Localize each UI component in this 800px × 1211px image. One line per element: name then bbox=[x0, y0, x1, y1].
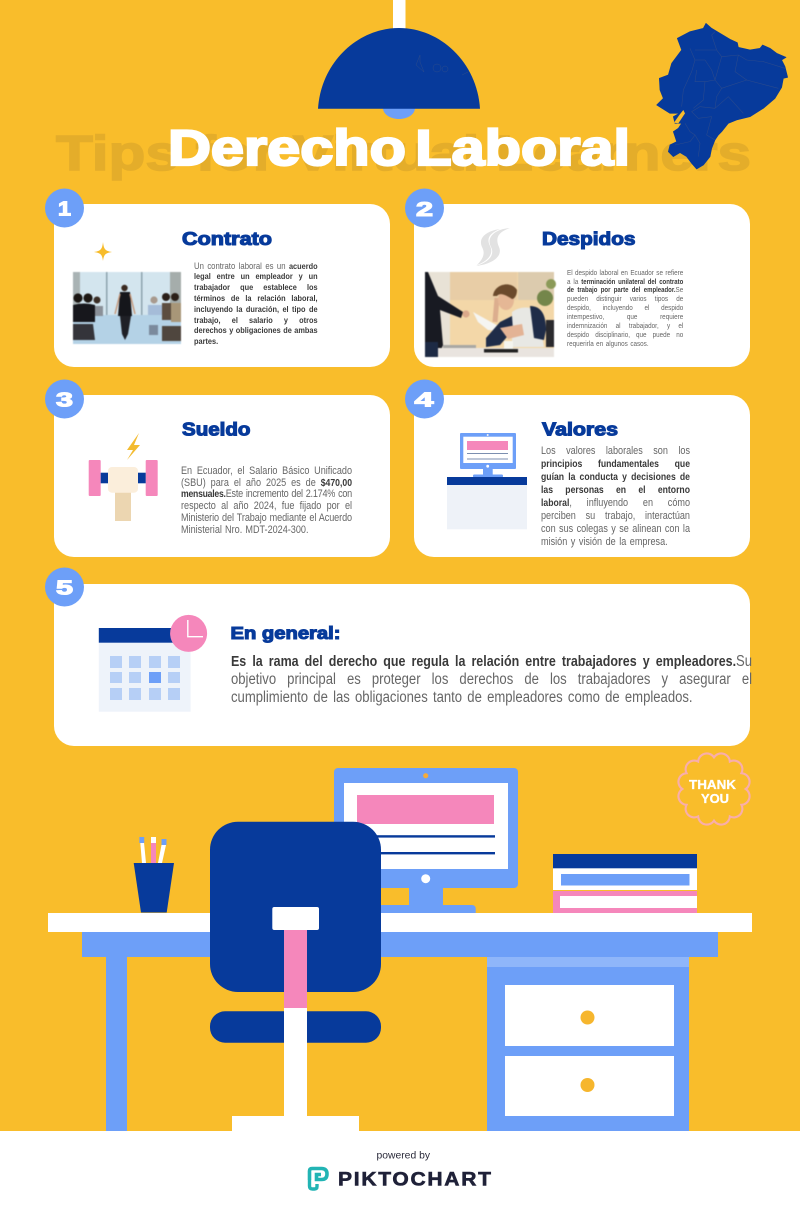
illustration: office chair bbox=[210, 822, 381, 1131]
text: Sueldo: Ministerio del Trabajo mediante el Acuerdo bbox=[181, 512, 352, 524]
ghost background title: Tips for Virtual Learners bbox=[56, 127, 751, 181]
heading: Despidos: Despidos bbox=[542, 229, 636, 249]
number badge 1: 1 bbox=[58, 198, 71, 220]
footer: powered by Piktochart bbox=[0, 1131, 800, 1211]
icon: fist with dumbbell and lightning bbox=[88, 433, 158, 521]
text: En general: cumplimiento de las obligaciones tanto de empleadores como de empleados. bbox=[230, 689, 692, 706]
text: Valores bbox=[541, 445, 690, 548]
text: Valores: laboral, influyendo en cómo bbox=[541, 497, 690, 509]
illustration: computer monitor bbox=[334, 768, 518, 913]
text: Despidos: El despido laboral en Ecuador se refiere bbox=[567, 268, 683, 277]
text: Valores: principios fundamentales que bbox=[541, 459, 690, 470]
number badge 3 bbox=[45, 380, 84, 418]
illustration: pen cup bbox=[134, 837, 174, 912]
text: Valores: Los valores laborales son los bbox=[541, 445, 690, 457]
text: Despidos bbox=[567, 268, 684, 348]
heading: Sueldo: Sueldo bbox=[182, 420, 250, 440]
number badge 2 bbox=[405, 188, 444, 228]
photo: business meeting bbox=[72, 272, 182, 344]
text: Contrato: derechos y obligaciones de ambas bbox=[194, 325, 317, 335]
text: Valores: misión y visión de la empresa. bbox=[541, 536, 668, 548]
text: Contrato bbox=[194, 261, 318, 346]
logo: Piktochart: PIKTOCHART bbox=[338, 1169, 493, 1191]
text: Sueldo bbox=[181, 465, 352, 536]
text: En general: objetivo principal es proteger los derechos de los trabajadores y asegurar el bbox=[230, 671, 752, 688]
text: Despidos: a la terminación unilateral del contrato bbox=[567, 276, 683, 286]
number badge 1 bbox=[45, 188, 84, 228]
text: powered by: powered by bbox=[376, 1150, 430, 1162]
number badge 4: 4 bbox=[414, 390, 435, 412]
heading: Contrato: Contrato bbox=[182, 229, 272, 249]
text: En general: Es la rama del derecho que regula la relación entre trabajadores y empleadores.Su bbox=[230, 653, 752, 670]
text: Despidos: indemnización al trabajador, y el bbox=[567, 321, 683, 330]
illustration: stack of books bbox=[553, 854, 697, 913]
number badge 5: 5 bbox=[56, 578, 73, 600]
text: En general bbox=[230, 653, 752, 706]
number badge 4 bbox=[405, 380, 444, 418]
logo: Piktochart bbox=[308, 1166, 493, 1191]
number badge 5 bbox=[45, 568, 84, 606]
text: Contrato: legal entre un empleador y un bbox=[194, 271, 317, 281]
icon: monitor on desk bbox=[447, 433, 527, 530]
panel: En general bbox=[54, 584, 750, 746]
badge: thank you: YOU bbox=[701, 791, 729, 806]
text: Valores: las personas en el entorno bbox=[541, 485, 690, 496]
panel: Contrato bbox=[54, 204, 390, 367]
number badge 2: 2 bbox=[416, 199, 433, 221]
panel: Sueldo bbox=[54, 395, 390, 557]
text: Valores: con sus colegas y se alinean con la bbox=[541, 523, 690, 535]
photo: dismissed employee bbox=[424, 271, 557, 358]
text: Despidos: despido disciplinario, que puede no bbox=[567, 330, 683, 339]
title: Derecho Laboral bbox=[168, 120, 630, 176]
icon: grey swirl bbox=[476, 228, 510, 266]
text: Sueldo: respecto al año 2024, fue fijado por el bbox=[181, 500, 352, 512]
text: Sueldo: (SBU) para el año 2025 es de $470,00 bbox=[181, 477, 352, 489]
text: Despidos: de trabajo por parte del empleador.Se bbox=[567, 285, 683, 294]
heading: Valores: Valores bbox=[542, 420, 618, 440]
text: Contrato: incluyendo la duración, el tipo de bbox=[194, 304, 317, 314]
text: Sueldo: En Ecuador, el Salario Básico Unificado bbox=[181, 465, 352, 477]
icon: map of Ecuador bbox=[656, 23, 788, 170]
text: Contrato: trabajador que establece los bbox=[194, 282, 317, 292]
text: Sueldo: mensuales.Este incremento del 2.174% con bbox=[181, 488, 352, 500]
icon: ceiling lamp bbox=[318, 0, 480, 119]
heading: En general: En general: bbox=[230, 623, 340, 643]
text: Despidos: pueden distinguir varios tipos de bbox=[567, 294, 683, 303]
illustration: desk bbox=[48, 913, 752, 1131]
badge: thank you bbox=[677, 752, 751, 826]
text: Contrato: términos de la relación laboral, bbox=[194, 293, 317, 303]
text: Contrato: trabajo, el salario y otros bbox=[194, 315, 317, 325]
panel: Despidos bbox=[414, 204, 750, 367]
number badge 3: 3 bbox=[56, 390, 73, 412]
text: Sueldo: Ministerial Nro. MDT-2024-300. bbox=[181, 524, 308, 536]
icon: sparkle star bbox=[94, 242, 112, 261]
text: Contrato: partes. bbox=[194, 336, 218, 346]
text: Valores: perciben su trabajo, interactúan bbox=[541, 510, 690, 522]
panel: Valores bbox=[414, 395, 750, 557]
text: Valores: guían la conducta y decisiones de bbox=[541, 472, 690, 483]
text: Contrato: Un contrato laboral es un acuerdo bbox=[194, 261, 317, 271]
text: Despidos: requerirla en algunos casos. bbox=[567, 339, 648, 348]
badge: thank you: THANK bbox=[689, 777, 737, 792]
text: Despidos: intempestivo, que requiere bbox=[567, 312, 683, 321]
text: Despidos: despido, incluyendo el despido bbox=[567, 303, 683, 312]
icon: calendar with clock bbox=[98, 614, 208, 712]
